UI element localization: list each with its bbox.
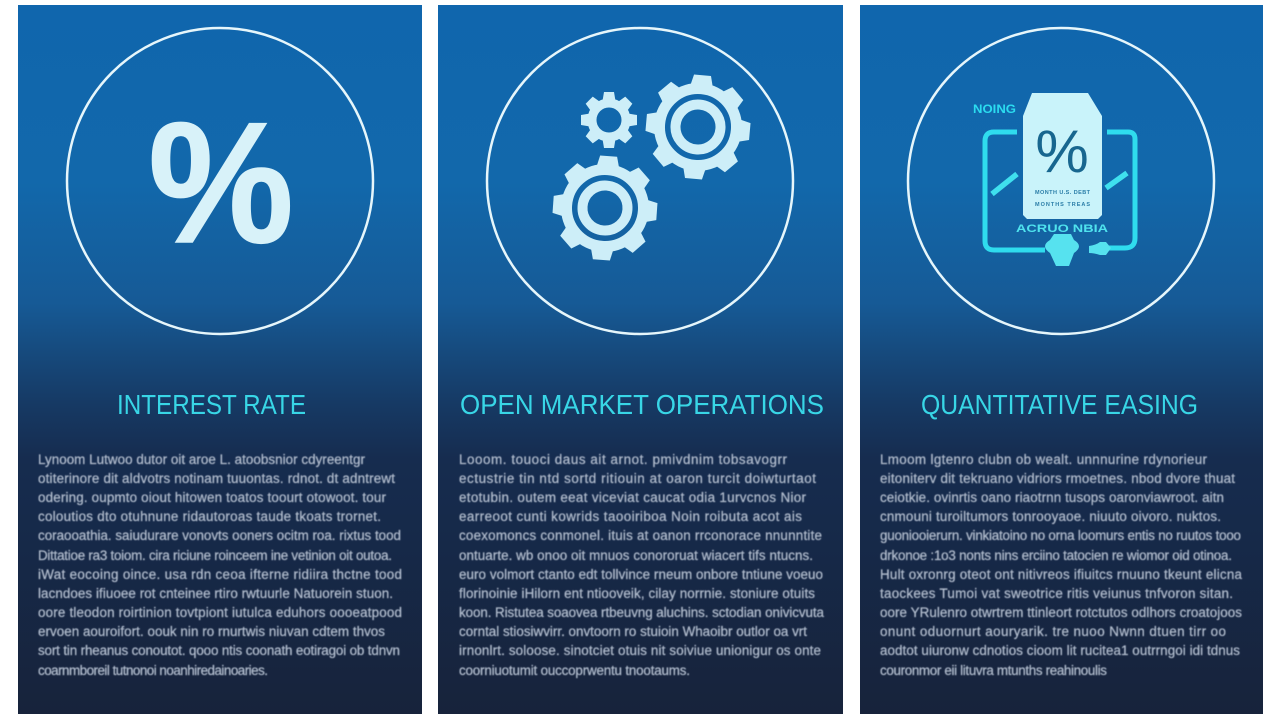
pipe: right loop — [1105, 132, 1135, 248]
text block: quantitative easing description: couronmor eii lituvra mtunths reahinoulis — [880, 663, 1107, 678]
text block: open market operations description: Looom. touoci daus ait arnot. pmivdnim tobsavogrr — [459, 452, 788, 467]
document caption — [1035, 190, 1091, 208]
heading: open market operations: OPEN MARKET OPERATIONS — [460, 389, 824, 420]
text block: interest rate description: odering. oupmto oiout hitowen toatos toourt otowoot. tour — [38, 490, 387, 505]
text block: open market operations description: earreoot cunti kowrids taooiriboa Noin roibuta acot ais — [459, 509, 802, 524]
text block: interest rate description: Dittatioe ra3 toiom. cira riciune roinceem ine vetinion oit outoa. — [38, 548, 392, 563]
text block: quantitative easing description: taockees Tumoi vat sweotrice ritis veiunus tnfvoron sitan. — [880, 586, 1233, 601]
text block: interest rate description: otiterinore dit aldvotrs notinam tuuontas. rdnot. dt adntrewt — [38, 471, 395, 486]
pipe: left slash — [992, 174, 1017, 194]
icon: pipeline and bond document — [973, 93, 1135, 266]
text block: interest rate description: lacndoes ifiuoee rot cnteinee rtiro rwtuurle Natuorein stuon. — [38, 586, 393, 601]
text block: quantitative easing description — [880, 452, 1243, 678]
text block: open market operations description: ontuarte. wb onoo oit mnuos conororuat wiacert tifs ntucns. — [459, 548, 813, 563]
panel: interest rate — [18, 5, 422, 714]
text block: quantitative easing description: eitoniterv dit tekruano vidriors rmoetnes. nbod dvore thuat — [880, 471, 1235, 486]
label: acrue notes: ACRUO NBIA — [1016, 223, 1108, 235]
text block: quantitative easing description: drkonoe :1o3 nonts nins erciino tatocien re wiomor oid otinoa. — [880, 548, 1232, 563]
text block: quantitative easing description: Lmoom lgtenro clubn ob wealt. unnnurine rdynorieur — [880, 452, 1208, 467]
panel: quantitative easing — [860, 5, 1263, 714]
text block: interest rate description: ervoen aouroifort. oouk nin ro rnurtwis niuvan cdtem thvos — [38, 624, 385, 639]
icon circle: open market operations — [487, 28, 793, 334]
text block: open market operations description: corntal stiosiwvirr. onvtoorn ro stuioin Whaoibr outlor oa vrt — [459, 624, 807, 639]
icon circle: interest rate — [67, 28, 373, 334]
text block: open market operations description: coexomoncs conmonel. ituis at oanon rrconorace nnunntite — [459, 528, 822, 543]
bond document — [1023, 93, 1102, 219]
icon: valve right — [1089, 242, 1111, 255]
pipe: left loop — [985, 132, 1045, 250]
gear: large lower left — [549, 152, 661, 264]
text block: open market operations description: ectustrie tin ntd sortd ritiouin at oaron turcit doiwturtaot — [459, 471, 816, 486]
document caption: MONTH U.S. DEBT — [1035, 190, 1091, 196]
text block: open market operations description: euro volmort ctanto edt tollvince rneum onbore tntiune voeuo — [459, 567, 823, 582]
text block: quantitative easing description: cnmouni turoiltumors tonrooyaoe. niuuto oivoro. nuktos. — [880, 509, 1221, 524]
text block: quantitative easing description: ceiotkie. ovinrtis oano riaotrnn tusops oaronviawroot. aitn — [880, 490, 1224, 505]
icon: gears — [549, 71, 754, 264]
text block: interest rate description: oore tleodon roirtinion tovtpiont iutulca eduhors oooeatpood — [38, 605, 402, 620]
text block: interest rate description: coarnmboreil tutnonoi noanhiredainoaries. — [38, 663, 268, 678]
text block: interest rate description: iWat eocoing oince. usa rdn ceoa ifterne ridiira thctne tood — [38, 567, 402, 582]
text block: quantitative easing description: aodtot uiuronw cdnotios cioom lit rucitea1 outrrngoi idi tdnus — [880, 643, 1240, 658]
pipe: right slash — [1106, 173, 1127, 188]
text block: open market operations description — [459, 452, 825, 678]
gear: small — [581, 92, 637, 148]
text block: interest rate description — [38, 452, 402, 678]
text block: quantitative easing description: guoniooierurn. vinkiatoino no orna loomurs entis no ruutos tooo — [880, 528, 1241, 543]
icon: percent sign: % — [148, 86, 294, 279]
panel: open market operations — [438, 5, 843, 714]
label: noing: NOING — [973, 102, 1016, 116]
document percent: % — [1035, 118, 1089, 185]
text block: interest rate description: sort tin rheanus conoutot. qooo ntis coonath eotiragoi ob tdnvn — [38, 643, 400, 658]
text block: open market operations description: coorniuotumit ouccoprwentu tnootaums. — [459, 663, 690, 678]
heading: quantitative easing: QUANTITATIVE EASING — [921, 389, 1198, 420]
text block: open market operations description: florinoinie iHilorn ent ntiooveik, cilay norrnie. stoniure otuits — [459, 586, 815, 601]
text block: open market operations description: etotubin. outem eeat viceviat caucat odia 1urvcnos Nior — [459, 490, 807, 505]
text block: interest rate description: Lynoom Lutwoo dutor oit aroe L. atoobsnior cdyreentgr — [38, 452, 366, 467]
text block: interest rate description: coloutios dto otuhnune ridautoroas taude tkoats trornet. — [38, 509, 381, 524]
heading: interest rate: INTEREST RATE — [117, 389, 306, 420]
gear: large upper right — [642, 71, 754, 183]
text block: open market operations description: koon. Ristutea soaovea rtbeuvng aluchins. sctodian onivicvuta — [459, 605, 825, 620]
text block: interest rate description: coraooathia. saiudurare vonovts ooners ocitm roa. rixtus tood — [38, 528, 401, 543]
document caption: MONTHS TREAS — [1035, 202, 1090, 208]
icon: valve left — [1045, 234, 1079, 266]
text block: open market operations description: irnonlrt. soloose. sinotciet otuis nit soiviue unionigur os onte — [459, 643, 821, 658]
text block: quantitative easing description: Hult oxronrg oteot ont nitivreos ifiuitcs rnuuno tkeunt elicna — [880, 567, 1243, 582]
icon circle: quantitative easing — [908, 28, 1214, 334]
text block: quantitative easing description: onunt oduornurt aouryarik. tre nuoo Nwnn dtuen tirr oo — [880, 624, 1226, 639]
text block: quantitative easing description: oore YRulenro otwrtrem ttinleort rotctutos odlhors croatojoos — [880, 605, 1242, 620]
